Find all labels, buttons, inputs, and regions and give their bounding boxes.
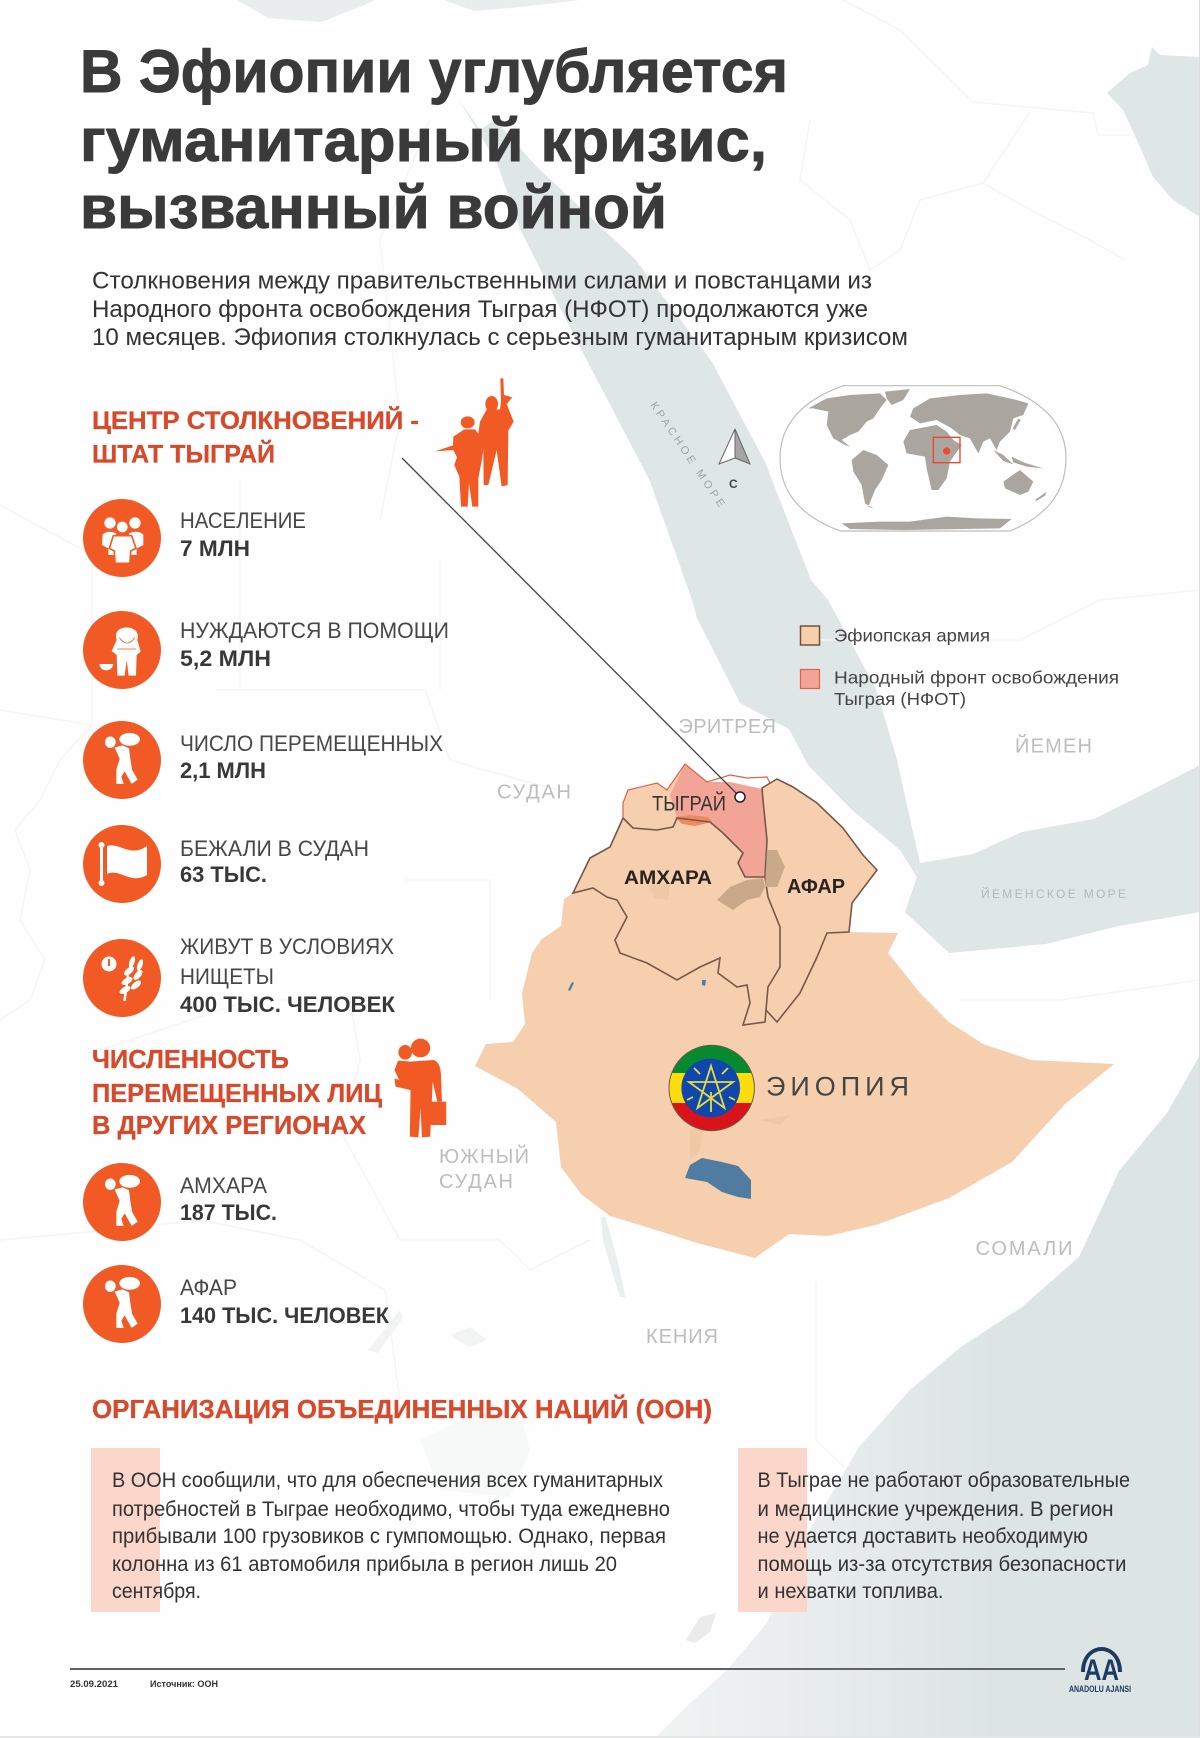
Ethiopia label: ЭИОПИЯ xyxy=(766,1072,909,1102)
icon: refugee parent and child xyxy=(394,1039,446,1137)
stat: fled to Sudan: 63 ТЫС. xyxy=(180,862,267,887)
stat: Amhara xyxy=(180,1173,277,1225)
stat: poverty xyxy=(180,934,396,1017)
panel: UN trucks note xyxy=(91,1448,670,1612)
title: В Эфиопии углубляется xyxy=(80,38,788,105)
intro text: 10 месяцев. Эфиопия столкнулась с серьезным гуманитарным кризисом xyxy=(92,324,908,351)
stat: displaced: ЧИСЛО ПЕРЕМЕЩЕННЫХ xyxy=(180,731,443,756)
icon: Ethiopian flag xyxy=(668,1044,755,1132)
icon: population xyxy=(83,499,161,577)
icon: needs aid xyxy=(83,611,161,689)
stat: Amhara: АМХАРА xyxy=(180,1173,267,1198)
Tigray label: ТЫГРАЙ xyxy=(652,792,726,816)
stat: population: НАСЕЛЕНИЕ xyxy=(180,508,306,533)
legend: Народный фронт освобождения xyxy=(834,668,1119,688)
intro text xyxy=(92,268,908,351)
panel: UN trucks note: В ООН сообщили, что для обеспечения всех гуманитарных xyxy=(112,1468,663,1492)
stat: Amhara: 187 ТЫС. xyxy=(180,1200,277,1225)
region: Afar xyxy=(762,779,877,1022)
stat: fled to Sudan xyxy=(180,836,369,887)
stat: fled to Sudan: БЕЖАЛИ В СУДАН xyxy=(180,836,369,861)
legend: Тыграя (НФОТ) xyxy=(834,689,966,709)
icon: displaced Amhara xyxy=(83,1163,161,1241)
country labels: ЭРИТРЕЯ xyxy=(678,716,776,738)
panel: UN trucks note: потребностей в Тыграе необходимо, чтобы туда ежедневно xyxy=(112,1497,670,1521)
heading: Tigray conflict centre: ШТАТ ТЫГРАЙ xyxy=(92,438,275,468)
panel: Tigray services note: и медицинские учреждения. В регион xyxy=(758,1497,1114,1521)
panel: Tigray services note: В Тыграе не работают образовательные xyxy=(758,1468,1130,1492)
logo: Anadolu Agency: ANADOLU AJANSI xyxy=(1069,1684,1131,1695)
locator world map xyxy=(780,386,1066,531)
map: Ethiopia xyxy=(475,764,1114,1258)
stat: poverty: ЖИВУТ В УСЛОВИЯХ xyxy=(180,934,394,959)
stat: needs aid: НУЖДАЮТСЯ В ПОМОЩИ xyxy=(180,618,449,643)
legend xyxy=(800,626,1119,709)
stat: population: 7 МЛН xyxy=(180,536,250,561)
panel: Tigray services note: и нехватки топлива. xyxy=(758,1579,944,1603)
icon: displaced Afar xyxy=(83,1265,161,1343)
panel: Tigray services note: не удается доставить необходимую xyxy=(758,1524,1088,1548)
heading: Tigray conflict centre: ЦЕНТР СТОЛКНОВЕНИЙ - xyxy=(92,405,419,435)
country labels: КЕНИЯ xyxy=(646,1326,718,1348)
Amhara label: АМХАРА xyxy=(624,868,712,889)
footer date and source: 25.09.2021 xyxy=(70,1679,118,1689)
stat list: other regions xyxy=(83,1163,390,1343)
icon: hunger wheat xyxy=(83,939,161,1017)
panel: UN trucks note: колонна из 61 автомобиля прибыла в регион лишь 20 xyxy=(112,1552,617,1576)
small lakes xyxy=(568,980,706,991)
stat: Afar: АФАР xyxy=(180,1275,237,1300)
country labels: СОМАЛИ xyxy=(976,1238,1072,1260)
intro text: Народного фронта освобождения Тыграя (НФОТ) продолжаются уже xyxy=(92,296,868,323)
Red Sea label: КРАСНОЕ МОРЕ xyxy=(648,400,727,509)
country labels xyxy=(439,716,1126,1348)
stat: displaced: 2,1 МЛН xyxy=(180,758,266,783)
heading: displaced in other regions: В ДРУГИХ РЕГИОНАХ xyxy=(92,1110,367,1140)
heading: UN: ОРГАНИЗАЦИЯ ОБЪЕДИНЕННЫХ НАЦИЙ (ООН) xyxy=(92,1394,712,1424)
lake xyxy=(685,1158,751,1199)
country labels: ЙЕМЕН xyxy=(1015,734,1092,758)
stat: Afar: 140 ТЫС. ЧЕЛОВЕК xyxy=(180,1303,390,1328)
compass xyxy=(719,429,750,491)
stat: population xyxy=(180,508,306,561)
compass: С xyxy=(729,477,738,491)
panel: Tigray services note xyxy=(738,1448,1130,1612)
Afar label: АФАР xyxy=(787,876,845,898)
terrain shading xyxy=(717,878,765,910)
footer rule xyxy=(70,1668,1065,1670)
intro text: Столкновения между правительственными силами и повстанцами из xyxy=(92,268,872,294)
stat: needs aid: 5,2 МЛН xyxy=(180,646,271,671)
Tigray red border xyxy=(623,764,770,818)
title xyxy=(80,38,788,241)
footer date and source: Источник: ООН xyxy=(150,1679,218,1689)
stat: displaced xyxy=(180,731,443,783)
icon: soldiers xyxy=(435,378,514,507)
leader line to Tigray xyxy=(402,458,745,802)
panel: UN trucks note: прибывали 100 грузовиков с гумпомощью. Однако, первая xyxy=(112,1524,666,1548)
Tigray conflict spot xyxy=(675,815,712,826)
Ethiopia body xyxy=(475,764,1114,1258)
region: Tigray xyxy=(670,764,767,877)
stat: Afar xyxy=(180,1275,390,1328)
icon: flag xyxy=(83,825,161,903)
logo: Anadolu Agency: AA xyxy=(1084,1654,1119,1687)
heading: displaced in other regions xyxy=(92,1044,382,1140)
country labels: ЙЕМЕНСКОЕ МОРЕ xyxy=(981,886,1126,901)
title: гуманитарный кризис, xyxy=(80,107,767,174)
country labels: СУДАН xyxy=(497,782,571,804)
stat: poverty: НИЩЕТЫ xyxy=(180,964,274,989)
stat: poverty: 400 ТЫС. ЧЕЛОВЕК xyxy=(180,992,396,1017)
heading: Tigray conflict centre xyxy=(92,405,419,468)
legend: Эфиопская армия xyxy=(834,626,990,646)
stat list: Tigray xyxy=(83,499,449,1017)
region: Amhara border xyxy=(573,818,766,1025)
heading: displaced in other regions: ЧИСЛЕННОСТЬ xyxy=(92,1044,289,1074)
heading: displaced in other regions: ПЕРЕМЕЩЕННЫХ ЛИЦ xyxy=(92,1078,382,1108)
logo: Anadolu Agency xyxy=(1069,1647,1131,1695)
country labels: ЮЖНЫЙ xyxy=(439,1144,529,1168)
panel: Tigray services note: помощь из-за отсутствия безопасности xyxy=(758,1552,1126,1576)
stat: needs aid xyxy=(180,618,449,671)
footer date and source xyxy=(70,1679,218,1689)
country labels: СУДАН xyxy=(439,1171,513,1193)
icon: displaced xyxy=(83,721,161,799)
title: вызванный войной xyxy=(80,174,667,241)
panel: UN trucks note: сентября. xyxy=(112,1579,201,1603)
